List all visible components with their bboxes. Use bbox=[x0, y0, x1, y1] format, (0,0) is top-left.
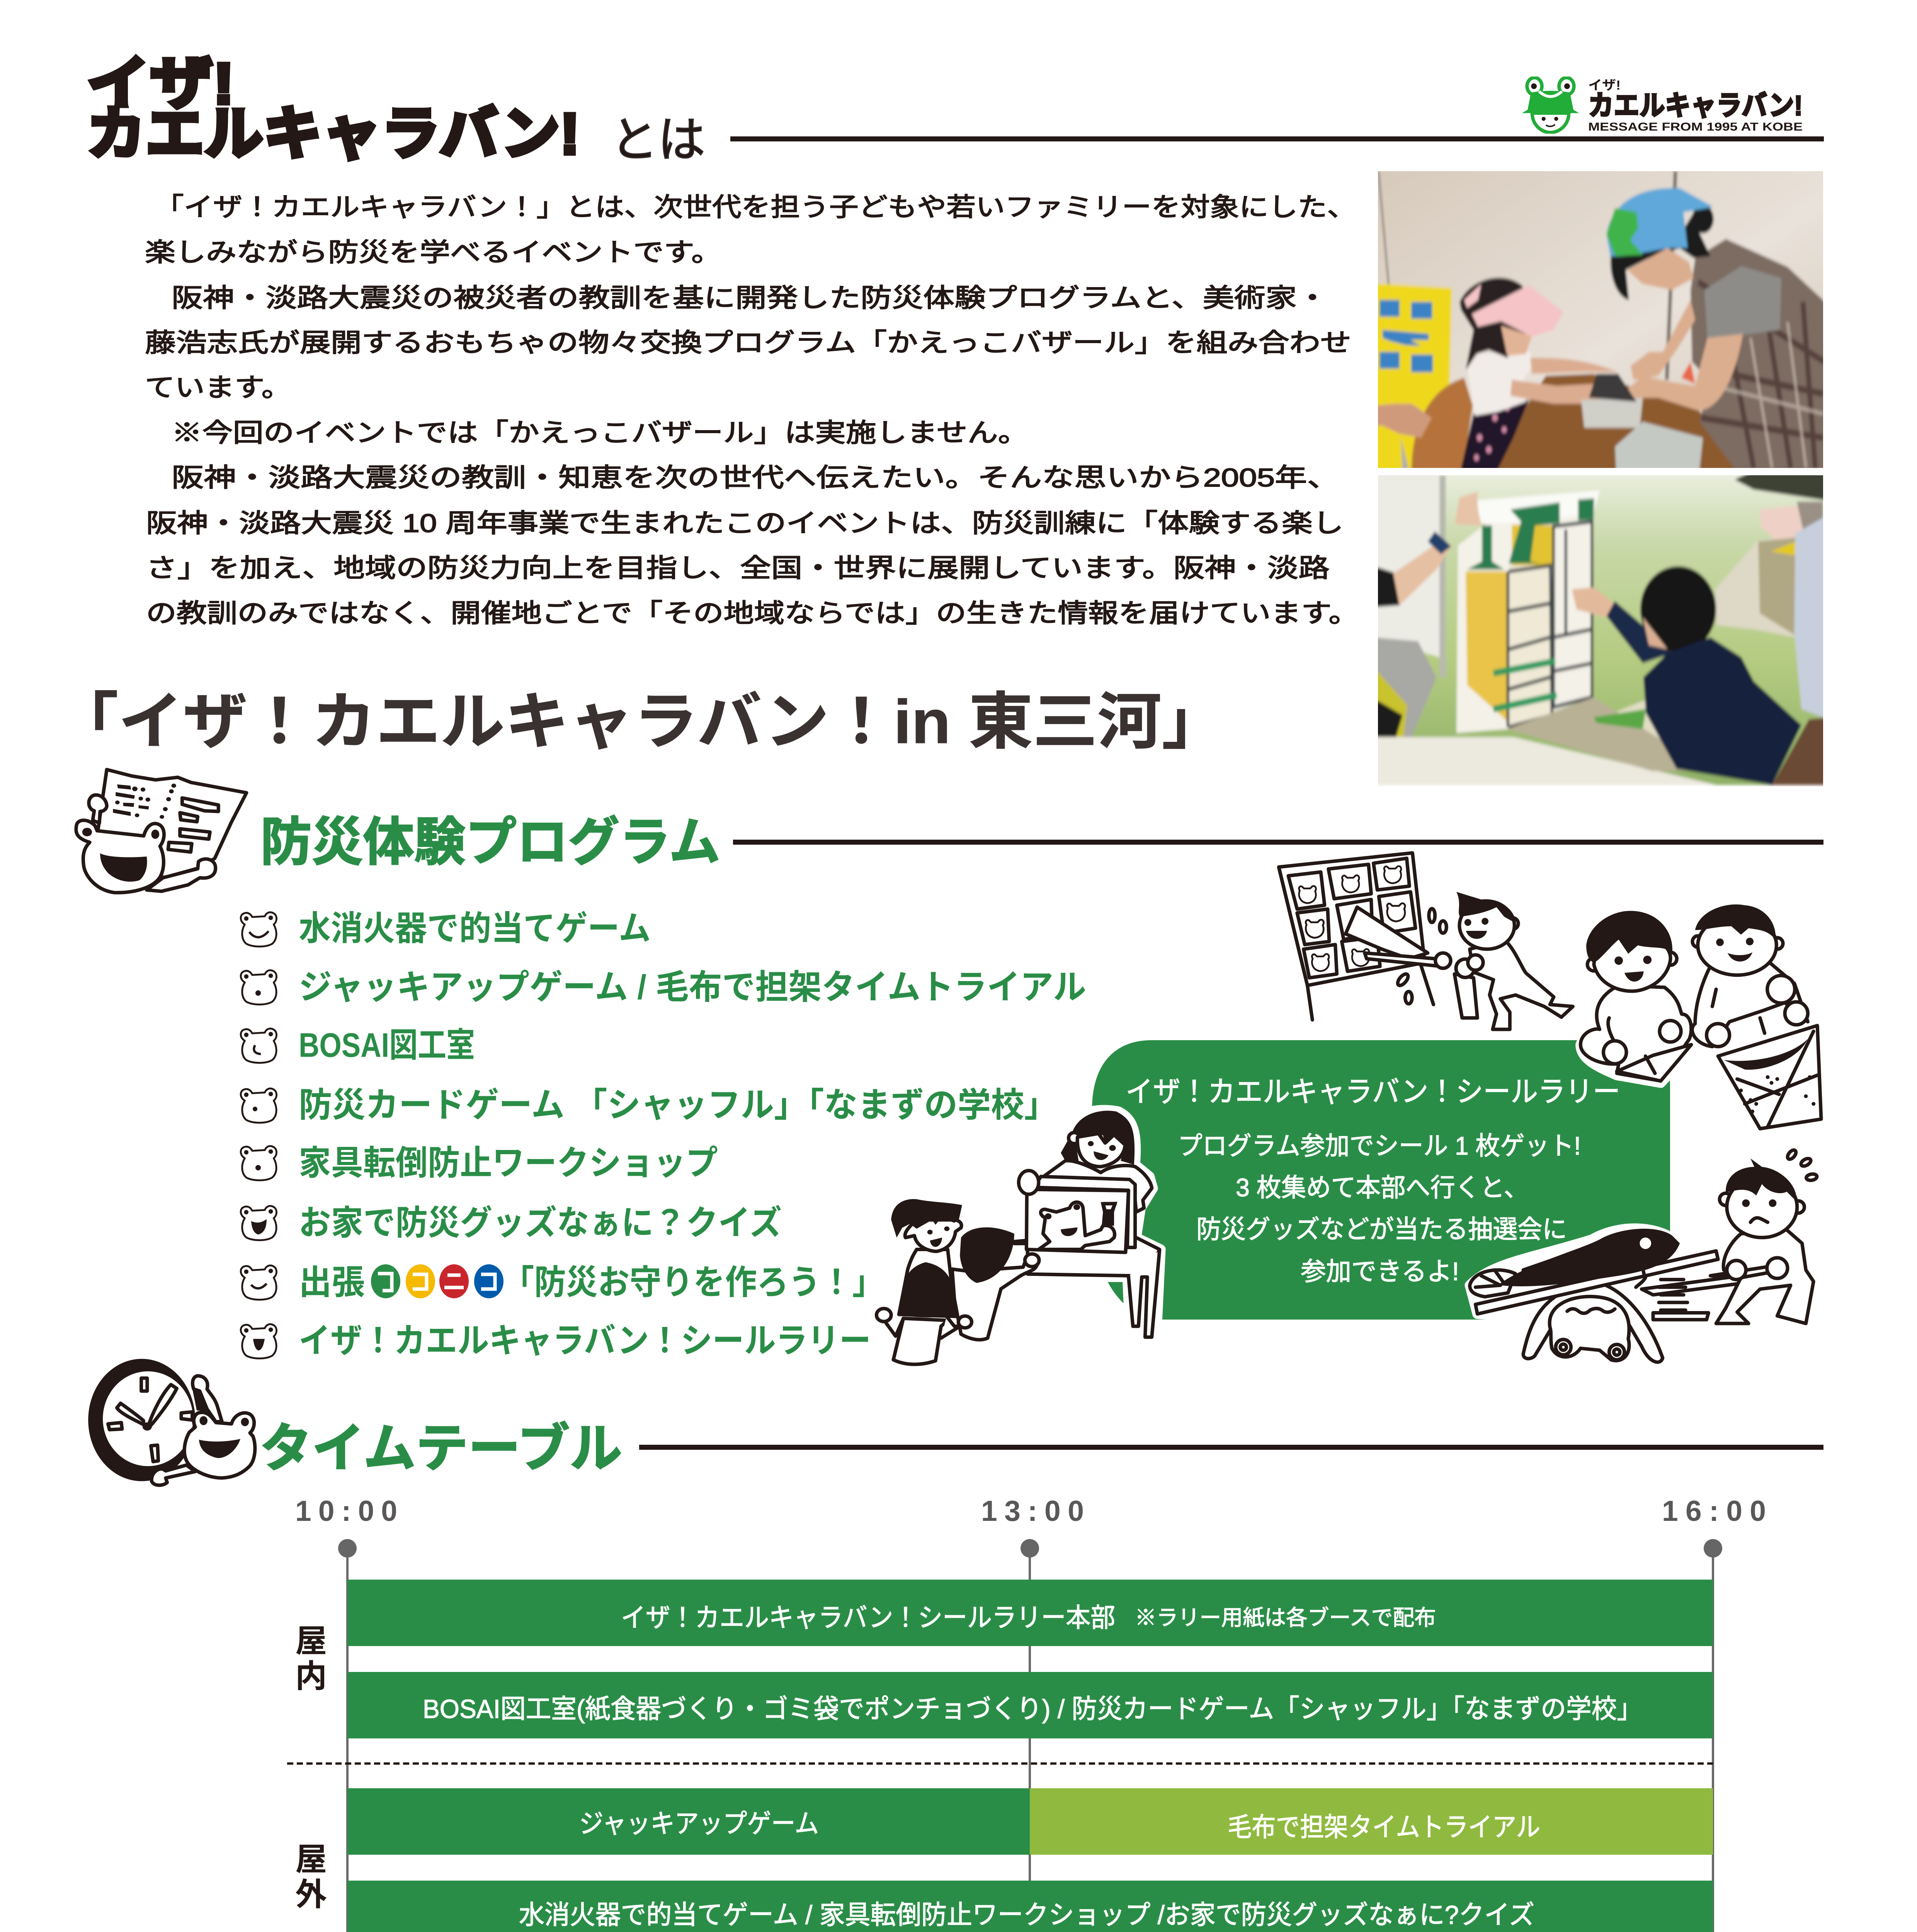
label: outdoor bbox=[295, 1842, 327, 1912]
photo: boy playing with furniture model bbox=[1372, 466, 1834, 785]
illustration: children with picture-story board bbox=[876, 1110, 1161, 1364]
text block: introduction: さ」を加え、地域の防災力向上を目指し、全国・世界に展開しています。阪神・淡路 bbox=[146, 554, 1330, 583]
title: イザ！カエルキャラバン！とは: カエルキャラバン! bbox=[87, 101, 580, 166]
logo: カエルキャラバン bbox=[1522, 78, 1803, 133]
logo: カエルキャラバン: イザ! bbox=[1588, 78, 1621, 93]
item: make a disaster charm: 「防災お守りを作ろう！」 bbox=[502, 1263, 884, 1301]
illustration: boy shooting extinguisher at frog targets bbox=[1279, 853, 1573, 1029]
heading: タイムテーブル: タイムテーブル bbox=[260, 1419, 622, 1478]
bar: sticker rally HQ: イザ！カエルキャラバン！シールラリー本部 bbox=[621, 1603, 1115, 1633]
label: indoor: 内 bbox=[295, 1659, 327, 1694]
title: イザ！カエルキャラバン！とは: イザ! bbox=[87, 51, 234, 116]
label: indoor: 屋 bbox=[295, 1624, 327, 1659]
item: jack up game and blanket stretcher: ジャッキアップゲーム / 毛布で担架タイムトライアル bbox=[299, 968, 1086, 1006]
text block: introduction: 阪神・淡路大震災の教訓・知恵を次の世代へ伝えたい。そんな思いから2005年、 bbox=[172, 463, 1339, 492]
heading: 防災体験プログラム: 防災体験プログラム bbox=[260, 813, 720, 871]
illustration: two children making a bag bbox=[1580, 905, 1821, 1129]
item: sticker rally: イザ！カエルキャラバン！シールラリー bbox=[299, 1321, 871, 1360]
time labels: 13:00 bbox=[981, 1495, 1084, 1527]
logo: カエルキャラバン: MESSAGE FROM 1995 AT KOBE bbox=[1588, 121, 1803, 133]
panel: sticker rally callout: プログラム参加でシール 1 枚ゲット! bbox=[1178, 1131, 1581, 1160]
item: BOSAI workshop bbox=[241, 1026, 475, 1064]
photo: child and staff wrapping a box bbox=[1378, 171, 1823, 468]
subtitle: 「イザ！カエルキャラバン！in 東三河」: 「イザ！カエルキャラバン！in 東三河」 bbox=[54, 687, 1226, 756]
bar: jack up game bbox=[347, 1788, 1030, 1855]
logo: カエルキャラバン: カエルキャラバン! bbox=[1588, 90, 1803, 121]
panel: sticker rally callout: 3 枚集めて本部へ行くと、 bbox=[1236, 1173, 1529, 1202]
bar: outdoor programs: 水消火器で的当てゲーム / 家具転倒防止ワークショップ /お家で防災グッズなぁに?クイズ bbox=[519, 1900, 1534, 1930]
panel: sticker rally callout: 防災グッズなどが当たる抽選会に bbox=[1196, 1215, 1567, 1243]
time labels bbox=[295, 1495, 1766, 1527]
title: イザ！カエルキャラバン！とは bbox=[87, 51, 705, 167]
time labels: 16:00 bbox=[1662, 1495, 1766, 1527]
item: make a disaster charm: 出張 bbox=[299, 1263, 365, 1301]
bar: jack up game: ジャッキアップゲーム bbox=[579, 1809, 819, 1838]
bar: blanket stretcher time trial bbox=[1030, 1788, 1713, 1855]
list: program items bbox=[241, 909, 1086, 1360]
bar: blanket stretcher time trial: 毛布で担架タイムトライアル bbox=[1228, 1813, 1540, 1842]
text block: introduction: 楽しみながら防災を学べるイベントです。 bbox=[145, 238, 722, 267]
text block: introduction: ています。 bbox=[145, 373, 291, 402]
chart: timetable bbox=[287, 1495, 1766, 1932]
title: イザ！カエルキャラバン！とは: とは bbox=[611, 113, 705, 167]
text block: introduction: 阪神・淡路大震災の被災者の教訓を基に開発した防災体験プログラムと、美術家・ bbox=[172, 284, 1328, 313]
panel: sticker rally callout: イザ！カエルキャラバン！シールラリー bbox=[1126, 1075, 1620, 1108]
icon: clock and frog bbox=[88, 1359, 255, 1485]
text block: introduction: 藤浩志氏が展開するおもちゃの物々交換プログラム「かえっこバザール」を組み合わせ bbox=[145, 328, 1351, 357]
item: water extinguisher game: 水消火器で的当てゲーム bbox=[299, 909, 651, 947]
text block: introduction: 「イザ！カエルキャラバン！」とは、次世代を担う子どもや若いファミリーを対象にした、 bbox=[155, 193, 1356, 222]
icon: frog reading newspaper bbox=[76, 770, 247, 893]
label: outdoor: 外 bbox=[295, 1877, 327, 1912]
bar: outdoor programs bbox=[347, 1881, 1713, 1932]
bar: BOSAI workshop and card game: BOSAI図工室(紙食器づくり・ゴミ袋でポンチョづくり) / 防災カードゲーム「シャッフル」「なまずの学校」 bbox=[423, 1694, 1642, 1724]
time labels: 10:00 bbox=[295, 1495, 397, 1527]
label: indoor bbox=[295, 1624, 327, 1694]
text block: introduction: ※今回のイベントでは「かえっこバザール」は実施しません。 bbox=[172, 418, 1029, 447]
item: disaster card game: 防災カードゲーム 「シャッフル」「なまずの学校」 bbox=[299, 1086, 1058, 1124]
bar: sticker rally HQ: ※ラリー用紙は各ブースで配布 bbox=[1135, 1605, 1436, 1630]
text block: introduction: 阪神・淡路大震災 10 周年事業で生まれたこのイベントは、防災訓練に「体験する楽し bbox=[146, 509, 1344, 538]
label: outdoor: 屋 bbox=[295, 1842, 327, 1877]
panel: sticker rally callout bbox=[1092, 1040, 1670, 1320]
bar: sticker rally HQ bbox=[347, 1580, 1713, 1646]
text block: introduction bbox=[145, 193, 1359, 628]
item: emergency goods quiz: お家で防災グッズなぁに？クイズ bbox=[299, 1204, 782, 1242]
item: make a disaster charm bbox=[241, 1263, 884, 1301]
item: BOSAI workshop: BOSAI図工室 bbox=[299, 1026, 475, 1064]
bar: BOSAI workshop and card game bbox=[347, 1672, 1713, 1738]
text block: introduction: の教訓のみではなく、開催地ごとで「その地域ならでは」の生きた情報を届けています。 bbox=[146, 599, 1359, 628]
item: furniture workshop: 家具転倒防止ワークショップ bbox=[299, 1144, 718, 1182]
panel: sticker rally callout: 参加できるよ! bbox=[1301, 1257, 1459, 1286]
illustration: boy pressing seesaw with catfish and frog bbox=[1470, 1149, 1817, 1364]
